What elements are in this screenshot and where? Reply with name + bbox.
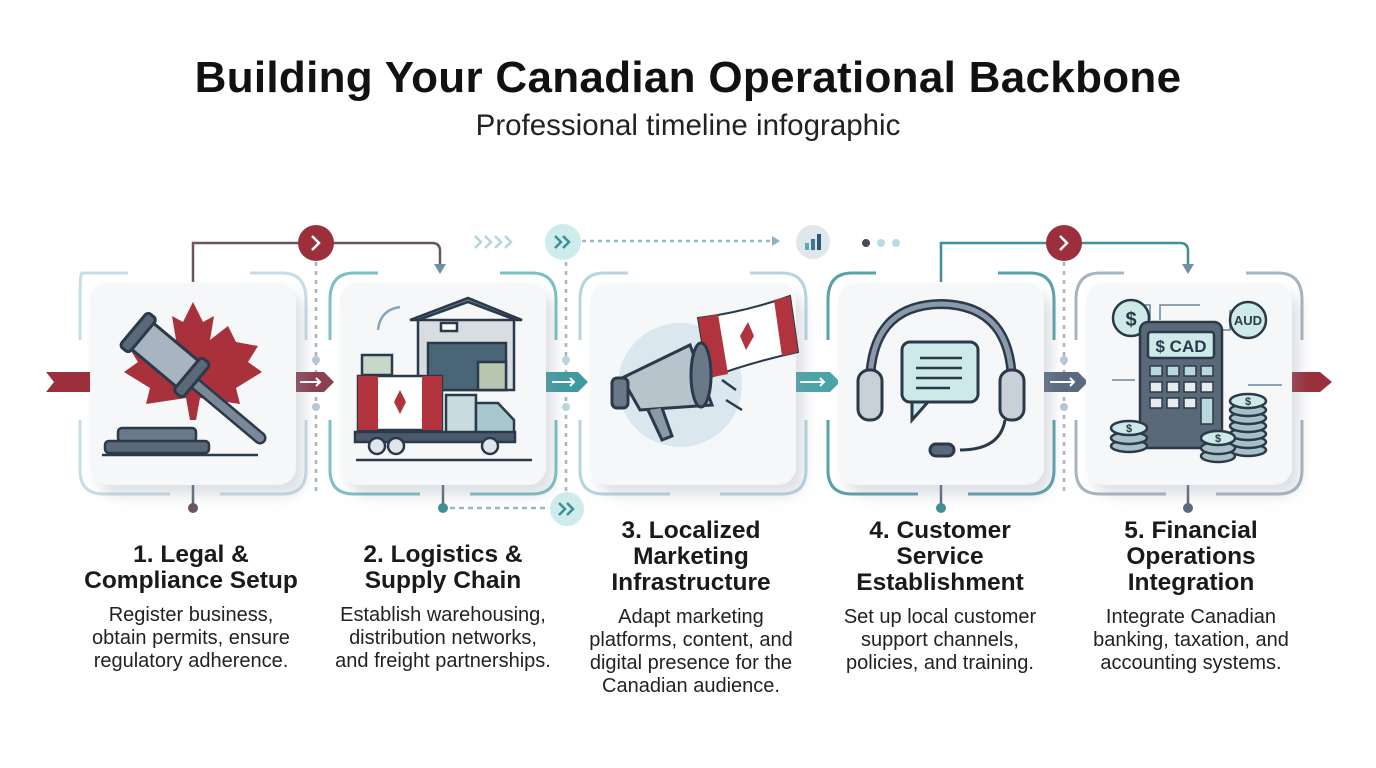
step 4 text [844, 517, 1036, 674]
icon: calculator and coins: $ [1245, 396, 1251, 408]
step 1 text: Register business, [109, 604, 273, 626]
icon: calculator and coins: AUD [1234, 313, 1262, 328]
arrows between cards [46, 372, 92, 392]
step 3 text: Adapt marketing [618, 606, 764, 628]
step 3 text: Marketing [633, 543, 749, 570]
card 3 [590, 283, 796, 485]
step 5 text: Integration [1128, 569, 1254, 596]
icon: calculator and coins: $ [1125, 309, 1137, 331]
step 3 text: platforms, content, and [589, 629, 793, 651]
step 2 text: distribution networks, [349, 627, 537, 649]
icon: calculator and coins: $ [1215, 433, 1221, 445]
step 3 text: digital presence for the [590, 652, 792, 674]
step 4 text: Establishment [856, 569, 1024, 596]
step 5 text: Operations [1126, 543, 1256, 570]
step 5 text [1093, 517, 1289, 674]
step 1 text: 1. Legal & [133, 541, 249, 568]
icon: calculator and coins [1111, 300, 1282, 462]
step 4 text: Set up local customer [844, 606, 1036, 628]
step 5 text: banking, taxation, and [1093, 629, 1289, 651]
step 3 text [589, 517, 793, 697]
step 4 text: Service [896, 543, 984, 570]
step 4 text: 4. Customer [869, 517, 1011, 544]
card 5 [1086, 283, 1292, 485]
step 1 text [84, 541, 298, 672]
step 2 text: and freight partnerships. [335, 650, 551, 672]
step 3 text: 3. Localized [622, 517, 760, 544]
icon: headset with chat bubble [858, 304, 1024, 456]
card frames [80, 273, 1302, 494]
step 1 text: Compliance Setup [84, 567, 298, 594]
title: Building Your Canadian Operational Backbone [195, 53, 1181, 102]
step 2 text: 2. Logistics & [363, 541, 523, 568]
step 5 text: accounting systems. [1100, 652, 1282, 674]
red circle chevrons [298, 225, 334, 261]
icon: calculator and coins: $ [1126, 423, 1132, 435]
step 5 text: 5. Financial [1124, 517, 1258, 544]
subtitle: Professional timeline infographic [476, 109, 900, 142]
card 4 [838, 283, 1044, 485]
connectors top [193, 241, 1188, 508]
step 2 text: Establish warehousing, [340, 604, 546, 626]
step 1 text: regulatory adherence. [94, 650, 288, 672]
icon: gavel and maple leaf [102, 302, 262, 455]
step 4 text: support channels, [861, 629, 1019, 651]
icon: megaphone with flag [612, 296, 798, 447]
icon: warehouse and truck [355, 298, 532, 460]
step 3 text: Infrastructure [611, 569, 771, 596]
step 5 text: Integrate Canadian [1106, 606, 1276, 628]
step 4 text: policies, and training. [846, 652, 1034, 674]
step 2 text: Supply Chain [365, 567, 521, 594]
step 3 text: Canadian audience. [602, 675, 780, 697]
teal chevron circles [545, 224, 581, 260]
icon: calculator and coins: $ CAD [1155, 337, 1207, 356]
card 1 [90, 283, 296, 485]
step 1 text: obtain permits, ensure [92, 627, 290, 649]
card 2 [340, 283, 546, 485]
step 2 text [335, 541, 551, 672]
